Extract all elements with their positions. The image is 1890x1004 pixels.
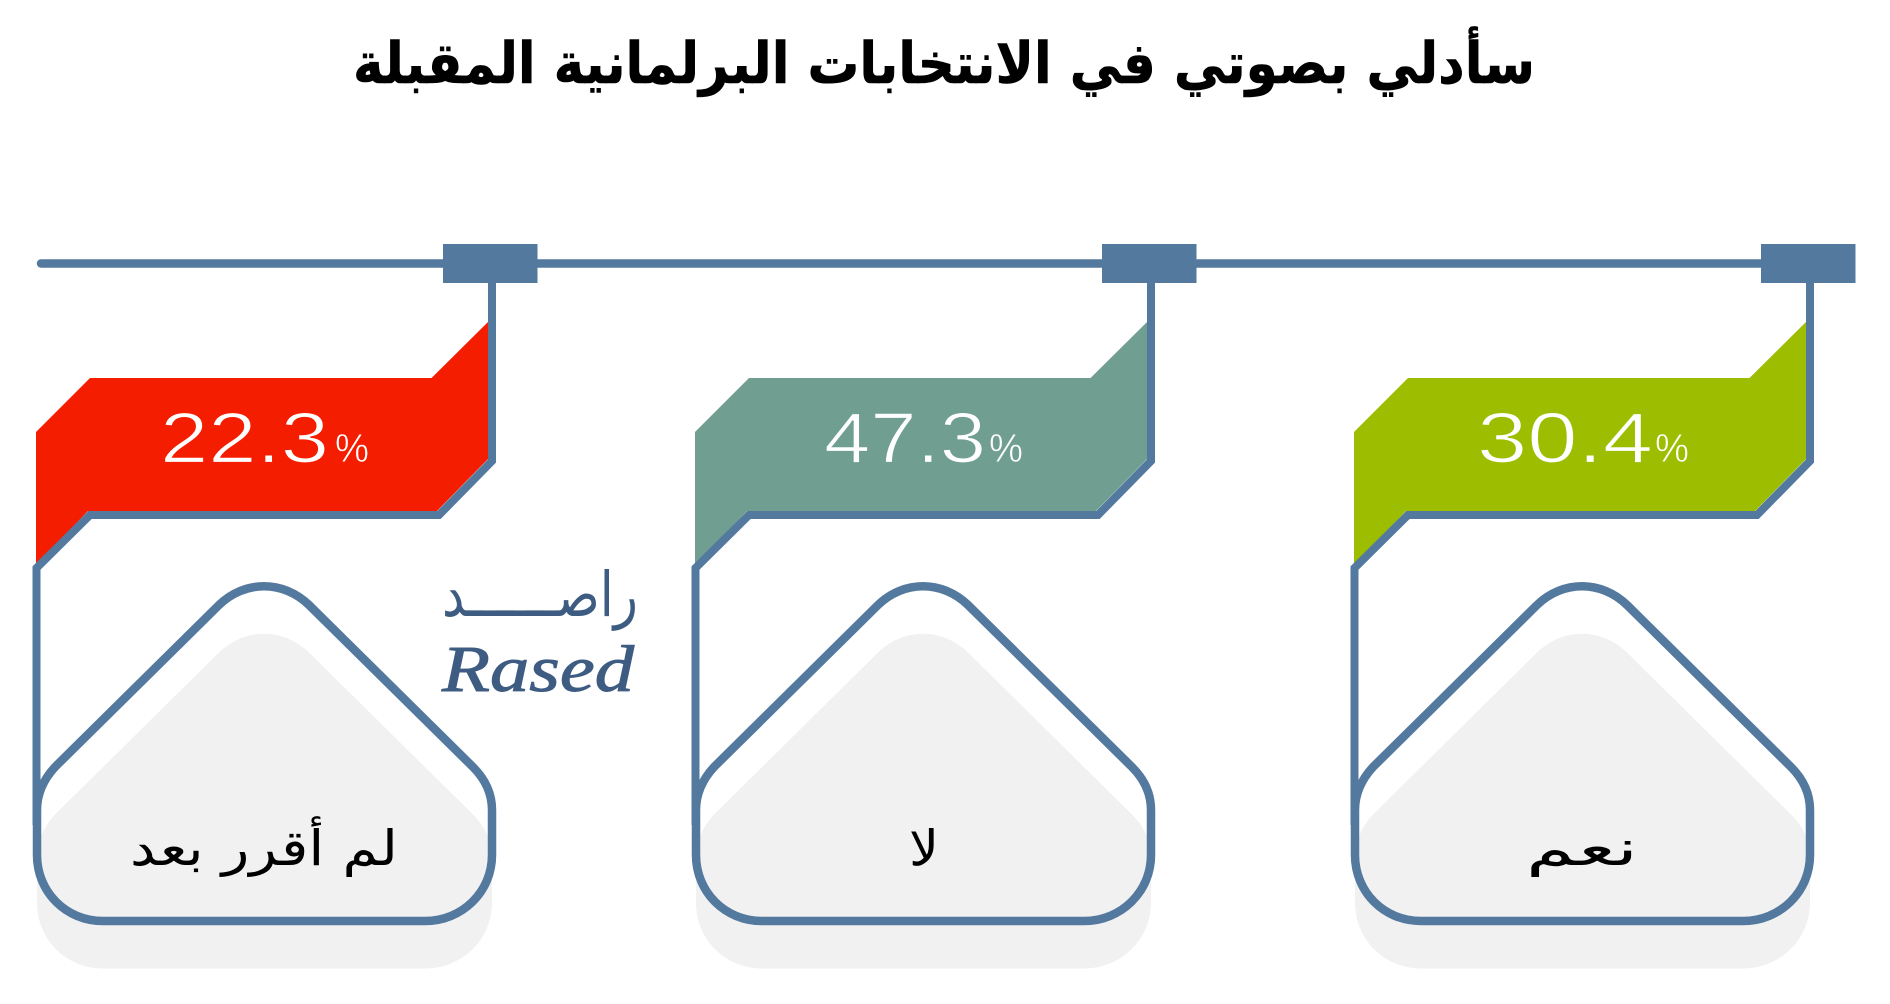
label: undecided: لم أقرر بعد bbox=[130, 816, 398, 877]
panel: yes 30.4% bbox=[1354, 283, 1810, 968]
timeline rail bbox=[41, 244, 1856, 283]
panel: no 47.3% bbox=[695, 283, 1151, 968]
percent sign: yes: % bbox=[1655, 427, 1689, 471]
ribbon: undecided bbox=[36, 322, 488, 565]
value: 30.4%: 30.4 bbox=[1477, 400, 1653, 478]
connector: no bbox=[696, 283, 1151, 825]
card shadow: undecided bbox=[37, 634, 492, 968]
connector: yes bbox=[1354, 283, 1810, 825]
card shadow: no bbox=[696, 634, 1151, 968]
value: 47.3%: 47.3 bbox=[824, 400, 986, 478]
connector: undecided bbox=[36, 283, 492, 825]
value: 22.3%: 22.3 bbox=[160, 400, 329, 478]
percent sign: undecided: % bbox=[335, 427, 369, 471]
percent sign: no: % bbox=[989, 427, 1023, 471]
logo: Rased bbox=[441, 558, 638, 706]
ribbon: yes bbox=[1354, 322, 1806, 565]
card shadow: yes bbox=[1355, 634, 1810, 968]
card outline: yes bbox=[1355, 586, 1810, 921]
card outline: undecided bbox=[37, 586, 492, 921]
label: yes: نعم bbox=[1526, 820, 1638, 877]
logo latin wordmark: Rased bbox=[441, 633, 635, 706]
logo arabic wordmark: راصــــــد bbox=[442, 558, 638, 631]
label: no: لا bbox=[909, 820, 939, 877]
title: سأدلي بصوتي في الانتخابات البرلمانية المقبلة bbox=[353, 26, 1535, 97]
card outline: no bbox=[696, 586, 1151, 921]
panel: undecided 22.3% bbox=[36, 283, 492, 968]
ribbon: no bbox=[695, 322, 1147, 565]
